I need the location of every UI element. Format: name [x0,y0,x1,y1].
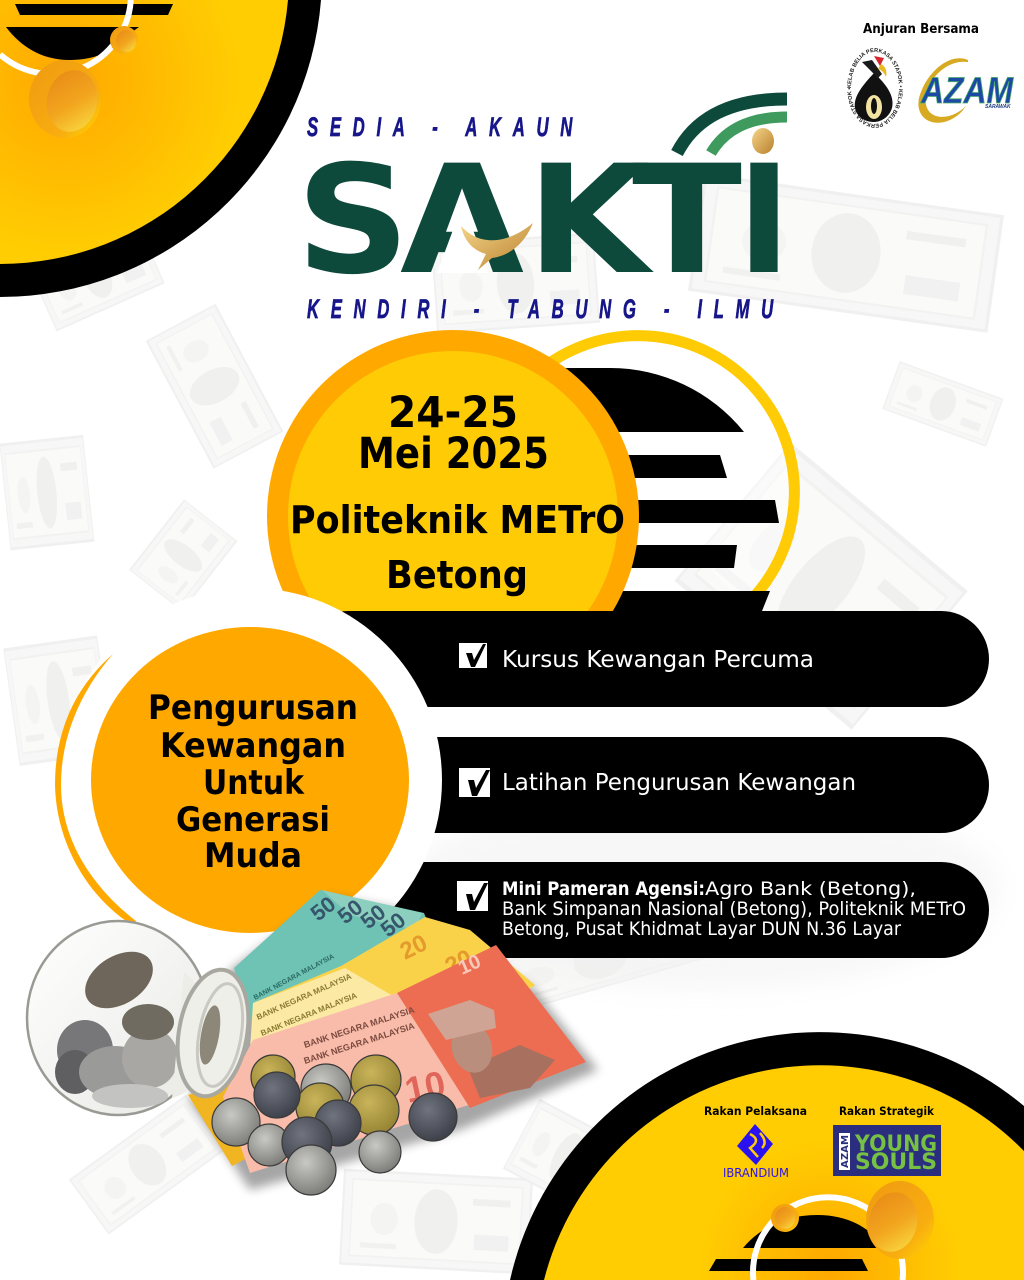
logo: AZAM Young Souls: YOUNG [854,1132,937,1157]
RM20 yellow notes: BANK NEGARA MALAYSIA [255,972,353,1022]
partners [704,1104,941,1180]
item 3 [457,878,966,940]
decorative corner: top-left yellow circle [0,0,321,297]
logo: AZAM Young Souls: SOULS [855,1150,937,1175]
RM50 teal notes: BANK NEGARA MALAYSIA [253,953,336,1002]
icon: small gold coin [110,26,138,54]
logo: Ibrandium [723,1124,789,1180]
RM20 yellow notes: 20 [396,929,432,965]
heading: Pengurusan Kewangan Untuk Generasi Muda: Generasi [176,800,330,840]
heading: Pengurusan Kewangan Untuk Generasi Muda [148,688,358,876]
heading: Anjuran Bersama: Anjuran Bersama [863,22,979,37]
wordmark letters: T [632,134,742,308]
logo: AZAM Young Souls [833,1125,941,1176]
text: date and venue: Politeknik METrO [290,498,625,542]
RM20 yellow notes [250,917,535,1070]
bar: Kursus Kewangan Percuma [300,611,989,707]
heading: Pengurusan Kewangan Untuk Generasi Muda: Pengurusan [148,688,358,728]
RM20 yellow notes: 20 [441,944,477,980]
RM10 pink and red note: 10 [401,1062,449,1111]
list content [457,643,966,940]
heading: Rakan Strategik: Rakan Strategik [839,1104,934,1118]
item 3: Betong, Pusat Khidmat Layar DUN N.36 Layar [502,918,901,940]
item 3: Bank Simpanan Nasional (Betong), Politeknik METrO [502,898,966,920]
wordmark letters: S [296,134,410,308]
image: ringgit banknotes, coins and jar [27,890,598,1195]
heading: Pengurusan Kewangan Untuk Generasi Muda: Untuk [203,763,305,803]
soft shadow behind list [400,790,1000,990]
text: date and venue: 24-25 [388,388,518,438]
RM50 teal notes [234,890,440,1020]
logo arcs and dot [677,99,787,154]
icon: small gold coin [771,1204,799,1232]
glass jar with coins [27,921,258,1115]
logo: AZAM Sarawak [918,58,1014,123]
RM20 yellow notes: BANK NEGARA MALAYSIA [259,991,358,1038]
RM50 teal notes: 50 [376,907,410,942]
RM50 teal notes: 50 [333,894,367,929]
heading: Rakan Pelaksana: Rakan Pelaksana [704,1104,807,1118]
icon: large gold coin [29,60,103,138]
date and venue badge with striped sun [267,330,794,702]
bar: Mini Pameran Agensi [300,862,989,958]
portrait [468,1045,555,1098]
item 3: Agro Bank (Betong), [705,878,916,900]
wordmark letters: A [400,134,524,308]
striped black sun [540,368,779,611]
bar: Latihan Pengurusan Kewangan [300,737,989,833]
RM50 teal notes: 50 [306,891,340,926]
decorative corner: bottom-right yellow circle [510,1032,1024,1280]
yellow ring [531,336,794,606]
RM10 pink and red note: BANK NEGARA MALAYSIA [303,1020,416,1066]
logo: AZAM Young Souls: AZAM [840,1135,851,1168]
orange crescent [55,654,136,925]
text: date and venue: Mei 2025 [358,429,549,479]
item 2: Latihan Pengurusan Kewangan [502,770,856,796]
text: date and venue: Betong [386,553,528,597]
wordmark letters [296,134,791,308]
item 1: Kursus Kewangan Percuma [502,647,814,673]
topic circle [55,588,442,972]
icon: large gold coin [863,1181,934,1259]
heading: Pengurusan Kewangan Untuk Generasi Muda: Muda [204,836,302,876]
logo: Ibrandium: IBRANDIUM [723,1166,789,1180]
RM50 teal notes: 50 [356,899,390,934]
list bars [300,611,989,958]
logo swoosh [461,223,533,270]
text: date and venue [290,388,625,597]
item 3: Mini Pameran Agensi: [502,878,705,900]
tagline: Kendiri Tabung Ilmu: KENDIRI - TABUNG - ILMU [307,294,774,324]
logo: AZAM Sarawak: SARAWAK [985,104,1011,110]
RM10 pink and red note: BANK NEGARA MALAYSIA [303,1004,416,1050]
wordmark letters: K [527,134,654,308]
logo: SAKTI [296,99,791,324]
RM10 pink and red note: 10 [455,950,484,980]
striped sun and ring [743,1215,885,1248]
logo: Kelab Belia Perkasa Stapok: KELAB BELIA PERKASA STAPOK • KELAB BELIA PERKASA STAPOK • [847,48,903,128]
wordmark letters: I [737,134,791,308]
RM10 pink and red note: RINGGIT MALAYSIA [477,1062,547,1099]
coins [212,1055,457,1195]
yellow note edge [188,1075,262,1166]
orange circle [267,330,639,702]
RM10 pink and red note [223,945,586,1173]
banknote shadow [190,897,598,1190]
organisers block [847,22,1014,128]
tagline: Sedia Akaun: SEDIA - AKAUN [307,112,573,142]
heading: Pengurusan Kewangan Untuk Generasi Muda: Kewangan [160,726,346,766]
